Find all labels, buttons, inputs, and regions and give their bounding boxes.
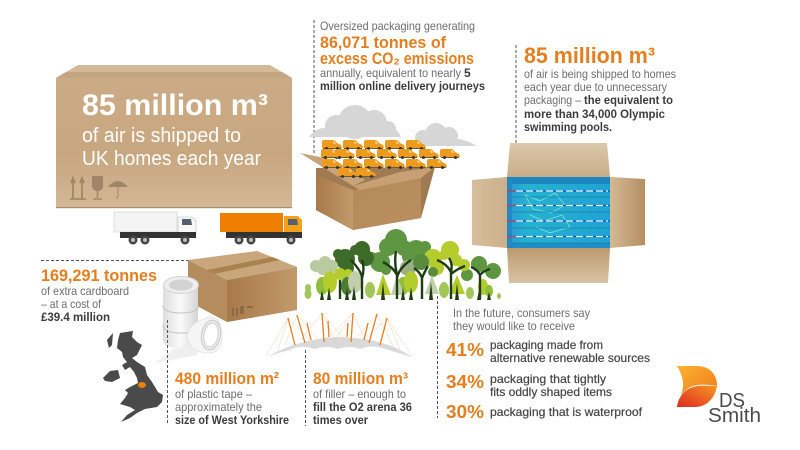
text block: future consumer preferences: packaging that tightly bbox=[490, 372, 606, 386]
text block: air shipped to homes: of air is being shipped to homes bbox=[524, 67, 676, 81]
text block: air shipped to homes: swimming pools. bbox=[524, 120, 612, 134]
text block: future consumer preferences: 34% bbox=[446, 372, 484, 392]
icon: emission clouds bbox=[309, 105, 477, 146]
text block: plastic tape bbox=[175, 370, 289, 427]
icon: orange truck bbox=[220, 213, 302, 244]
text block: air shipped to homes: the equivalent to bbox=[584, 93, 673, 107]
text block: filler: times over bbox=[313, 413, 368, 427]
text block: extra cardboard: £39.4 million bbox=[41, 310, 110, 324]
text block: plastic tape: size of West Yorkshire bbox=[175, 413, 289, 427]
icon: white truck bbox=[114, 212, 196, 244]
icon: closed cardboard box bbox=[188, 251, 297, 322]
text block: extra cardboard: of extra cardboard bbox=[41, 284, 129, 298]
text block: filler: of filler – enough to bbox=[313, 387, 406, 401]
marker: West Yorkshire bbox=[138, 382, 146, 388]
text block: plastic tape: approximately the bbox=[175, 400, 262, 414]
text block: CO2 emissions: 86,071 tonnes of bbox=[320, 33, 446, 52]
text block: future consumer preferences: alternative renewable sources bbox=[490, 351, 650, 365]
text block: extra cardboard: 169,291 tonnes bbox=[41, 267, 157, 285]
text block: air shipped to homes bbox=[524, 43, 676, 134]
text block: plastic tape: 480 million m² bbox=[175, 370, 279, 388]
text block: CO2 emissions: 5 bbox=[464, 66, 471, 80]
text block: future consumer preferences: packaging made from bbox=[490, 338, 603, 352]
text block: filler: fill the O2 arena 36 bbox=[313, 400, 412, 414]
icon: UK map bbox=[103, 331, 163, 422]
text block: air shipped to homes: packaging – bbox=[524, 93, 581, 107]
icon: handling symbols bbox=[70, 176, 128, 199]
text block: CO2 emissions: excess CO₂ emissions bbox=[320, 49, 474, 68]
text block: future consumer preferences: fits oddly shaped items bbox=[490, 385, 612, 399]
icon: open box with swimming pool bbox=[472, 143, 645, 283]
text block: future consumer preferences: packaging that is waterproof bbox=[490, 405, 643, 419]
text block: extra cardboard: – at a cost of bbox=[41, 297, 102, 311]
text block: future consumer preferences: 30% bbox=[446, 402, 484, 422]
van fleet bbox=[321, 140, 460, 178]
text block: future consumer preferences: In the future, consumers say bbox=[453, 306, 590, 320]
text block: air shipped to homes: more than 34,000 Olympic bbox=[524, 107, 665, 121]
text block: CO2 emissions: annually, equivalent to nearly bbox=[320, 66, 461, 80]
text block: future consumer preferences: they would like to receive bbox=[453, 319, 575, 333]
logo: DS Smith bbox=[677, 366, 761, 427]
text block: plastic tape: of plastic tape – bbox=[175, 387, 252, 401]
heading: 85 million m3: 85 million m³ bbox=[82, 89, 268, 122]
logo: DS Smith: DS bbox=[719, 390, 745, 412]
icon: tape rolls bbox=[155, 276, 223, 363]
text block: future consumer preferences bbox=[446, 306, 650, 422]
icon: open box with vans bbox=[300, 140, 460, 230]
text block: air shipped to homes: 85 million m³ bbox=[524, 43, 655, 68]
text block: filler: 80 million m³ bbox=[313, 370, 408, 388]
text block: future consumer preferences: 41% bbox=[446, 340, 484, 360]
text block: air shipped to homes: each year due to unnecessary bbox=[524, 80, 667, 94]
text block: extra cardboard bbox=[41, 267, 157, 324]
text block: filler bbox=[313, 370, 412, 427]
icon: forest bbox=[304, 229, 501, 300]
icon: O2 arena bbox=[266, 313, 412, 357]
text: air shipped line 1: of air is shipped to bbox=[82, 125, 241, 147]
logo: DS Smith: Smith bbox=[708, 405, 761, 427]
panel: large cardboard box bbox=[56, 65, 292, 208]
text: air shipped line 2: UK homes each year bbox=[82, 148, 261, 170]
text block: CO2 emissions: million online delivery journeys bbox=[320, 79, 485, 93]
text block: CO2 emissions: Oversized packaging generating bbox=[320, 19, 475, 33]
text block: CO2 emissions bbox=[320, 19, 485, 93]
